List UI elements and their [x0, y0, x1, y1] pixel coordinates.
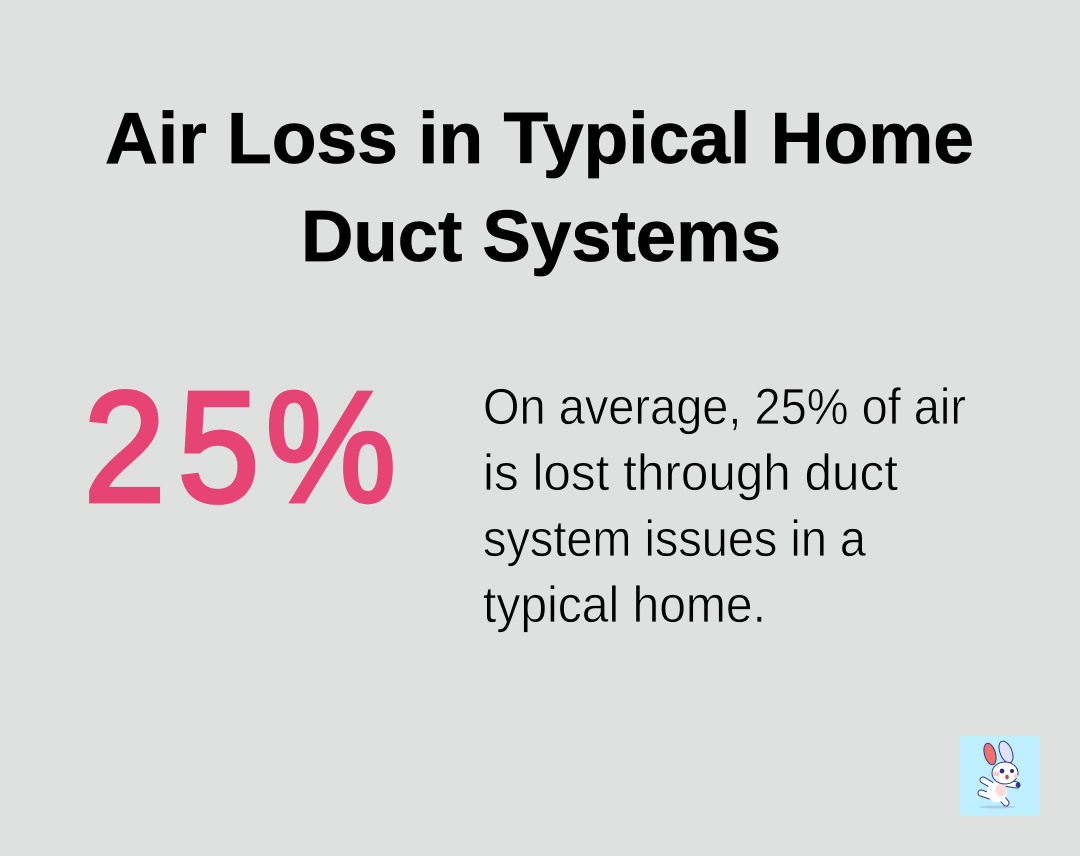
rabbit head: [992, 762, 1018, 784]
description text: [483, 378, 966, 633]
rabbit body: [987, 782, 1007, 802]
title: [105, 99, 974, 277]
description text: system issues in a: [483, 510, 867, 567]
rabbit legs and arms: [981, 780, 1017, 803]
description text: On average, 25% of air: [483, 378, 966, 435]
big statistic: 25%: 25%: [84, 360, 396, 535]
rabbit ears: [982, 742, 998, 766]
title: Air Loss in Typical Home: [105, 99, 974, 179]
icon: running rabbit logo: [960, 736, 1040, 816]
description text: is lost through duct: [483, 444, 898, 501]
title: Duct Systems: [301, 197, 781, 277]
description text: typical home.: [483, 576, 766, 633]
